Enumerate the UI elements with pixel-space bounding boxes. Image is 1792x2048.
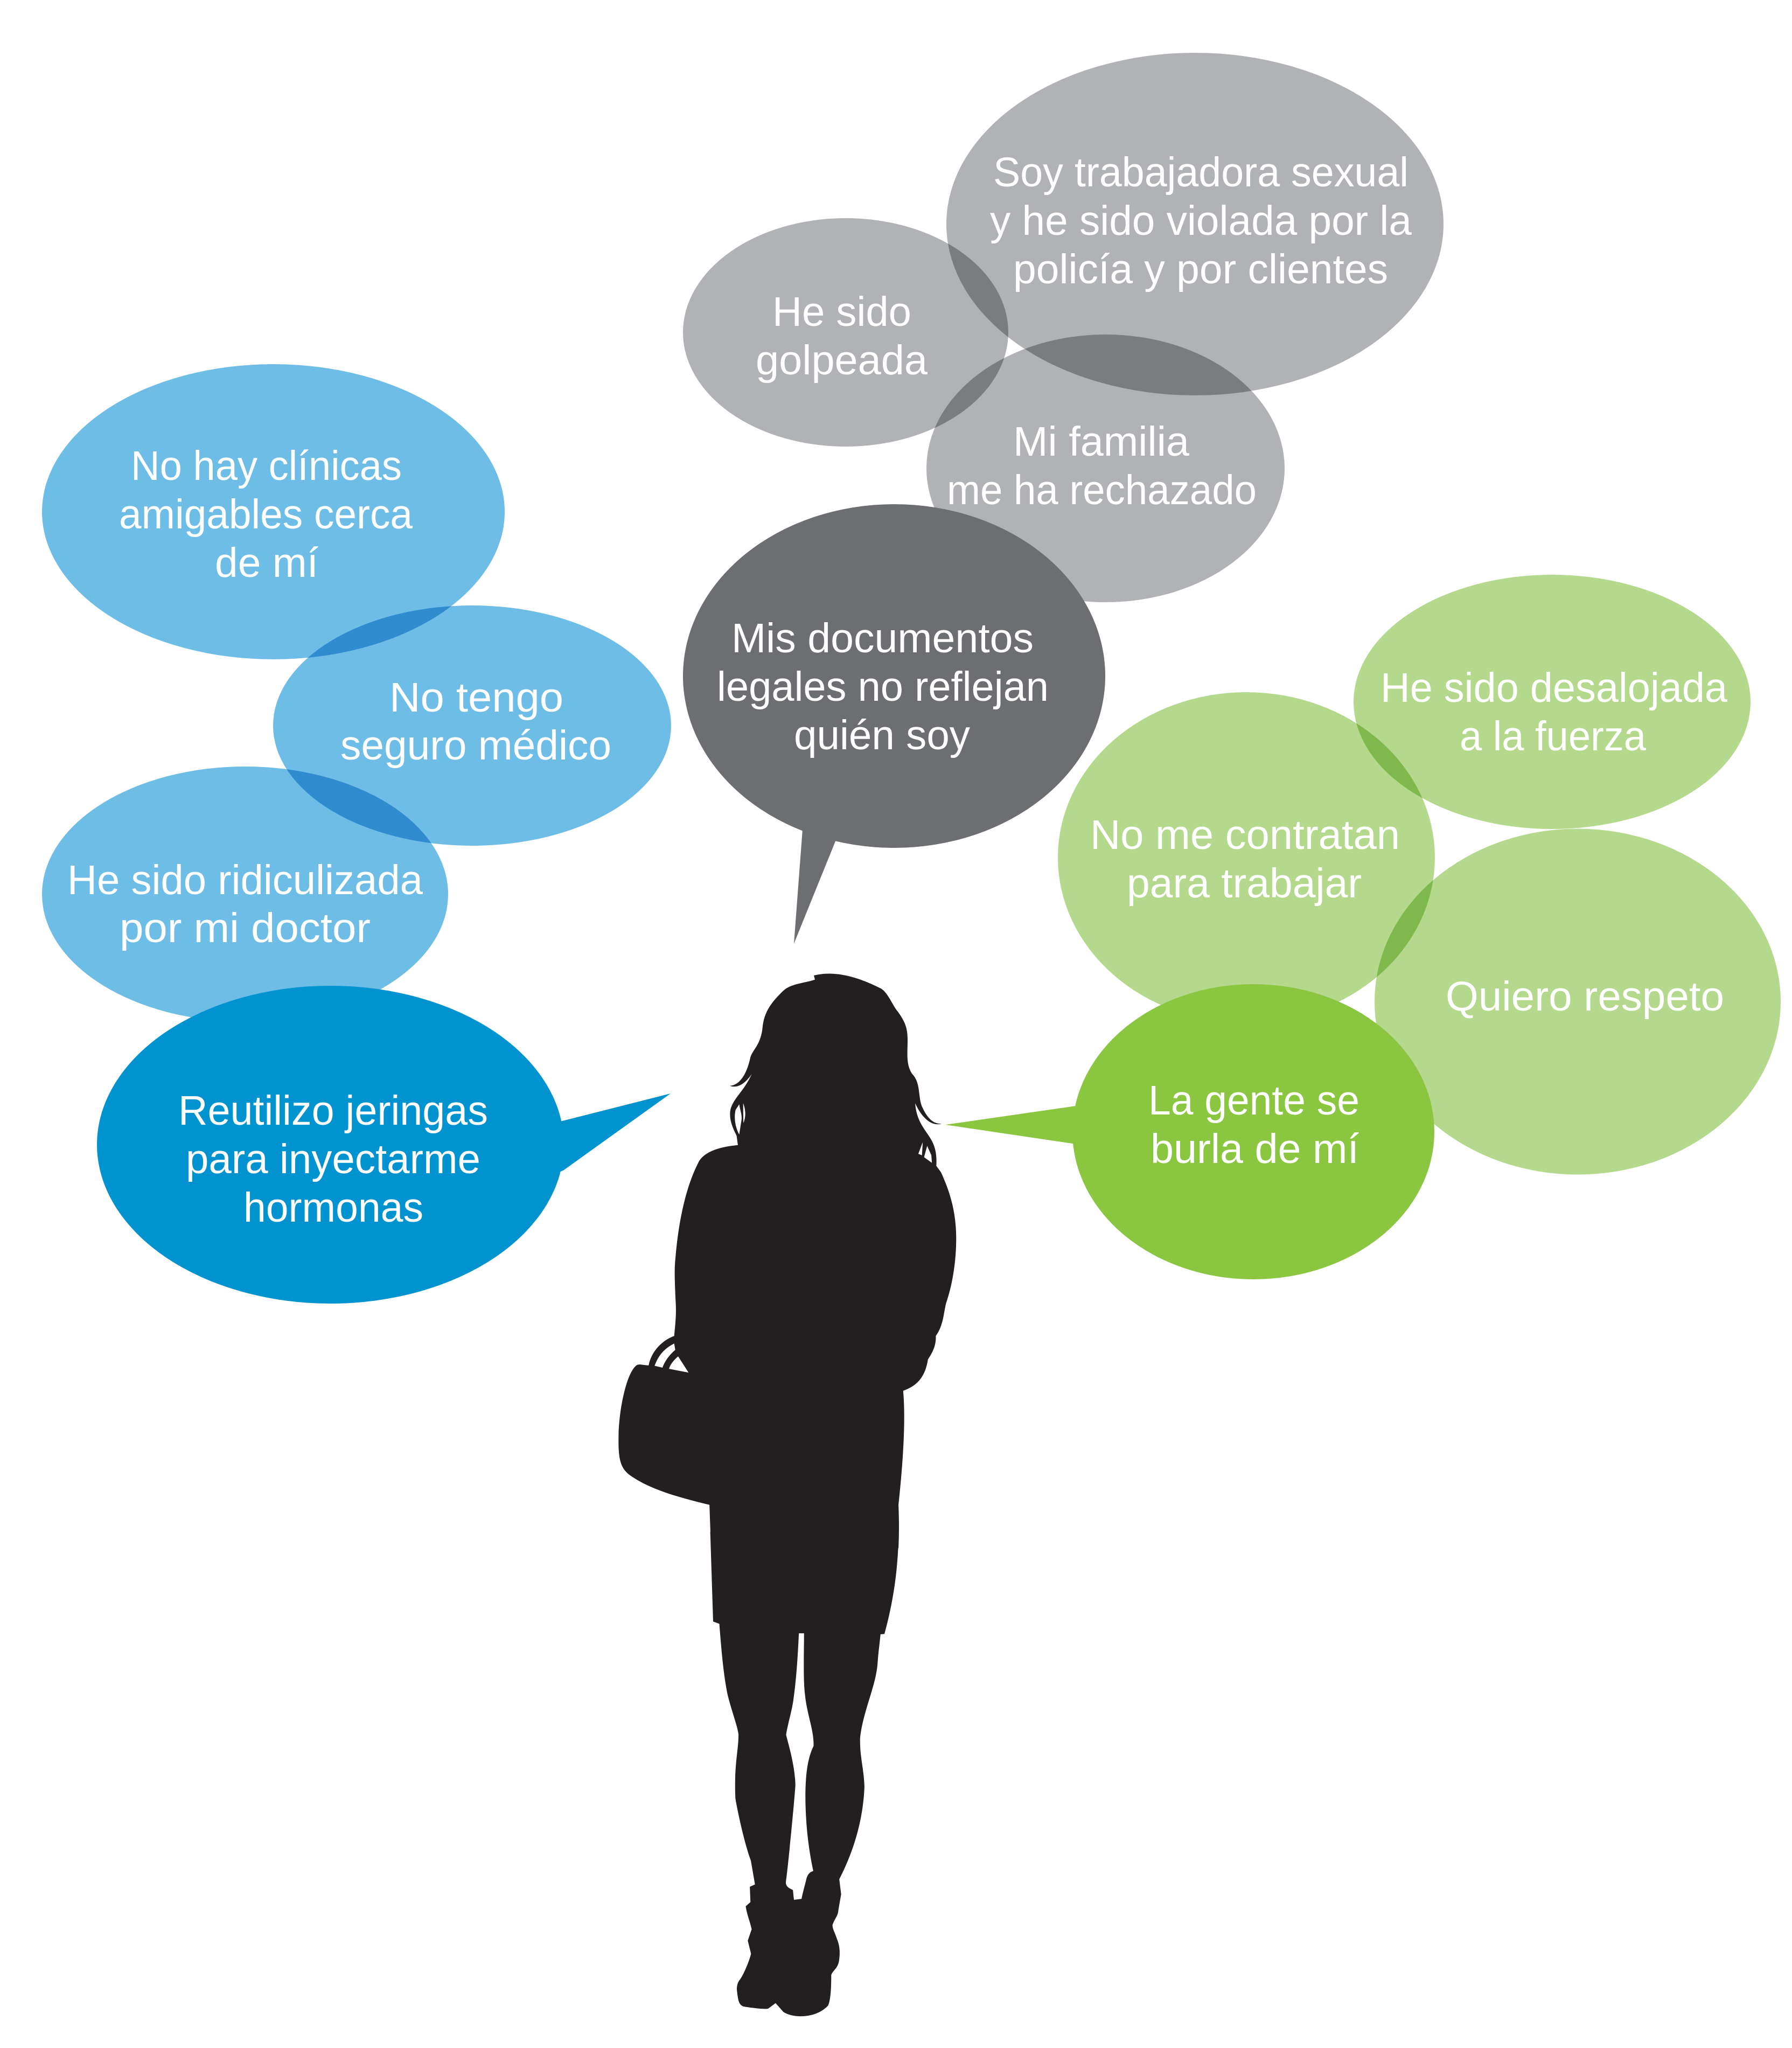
speech bubble: He sido ridiculizada por mi doctor: He sido ridiculizada xyxy=(67,857,423,903)
speech bubble: Reutilizo jeringas para inyectarme hormonas: para inyectarme xyxy=(186,1136,480,1182)
speech bubble: La gente se burla de mí xyxy=(945,984,1434,1279)
speech bubble: He sido ridiculizada por mi doctor xyxy=(42,767,448,1022)
speech bubble: Mis documentos legales no reflejan quién soy xyxy=(683,504,1105,944)
speech bubble: Mis documentos legales no reflejan quién soy: legales no reflejan xyxy=(717,664,1049,710)
speech bubble: Reutilizo jeringas para inyectarme hormonas: Reutilizo jeringas xyxy=(178,1088,488,1134)
speech bubble: No tengo seguro médico: seguro médico xyxy=(340,722,611,769)
speech bubble: Reutilizo jeringas para inyectarme hormonas xyxy=(97,986,671,1304)
speech bubble: No hay clínicas amigables cerca de mí xyxy=(42,364,505,659)
speech bubble: No me contratan para trabajar: para trabajar xyxy=(1127,860,1362,907)
speech bubble: Quiero respeto xyxy=(1375,828,1781,1174)
speech bubble: He sido desalojada a la fuerza xyxy=(1354,575,1751,829)
speech bubble: La gente se burla de mí: La gente se xyxy=(1148,1077,1359,1124)
speech bubble: Mi familia me ha rechazado xyxy=(926,335,1285,602)
speech bubble: He sido golpeada xyxy=(683,218,1008,447)
speech bubble: Soy trabajadora sexual y he sido violada por la policía y por clientes: y he sido violada por la xyxy=(990,198,1412,244)
speech bubble: No me contratan para trabajar xyxy=(1058,692,1435,1023)
speech bubble: He sido desalojada a la fuerza: a la fuerza xyxy=(1460,713,1646,760)
silhouette: woman with handbag xyxy=(618,974,956,2016)
speech bubble: He sido desalojada a la fuerza: He sido desalojada xyxy=(1380,665,1727,711)
speech bubble: Soy trabajadora sexual y he sido violada por la policía y por clientes: Soy trabajadora sexual xyxy=(993,149,1409,196)
speech bubble: He sido golpeada: He sido xyxy=(772,289,911,335)
speech bubble: Reutilizo jeringas para inyectarme hormonas: hormonas xyxy=(243,1185,423,1231)
speech bubble: Quiero respeto: Quiero respeto xyxy=(1446,973,1724,1020)
speech bubble: La gente se burla de mí: burla de mí xyxy=(1150,1126,1359,1172)
speech bubble: Soy trabajadora sexual y he sido violada por la policía y por clientes xyxy=(946,53,1444,395)
speech bubble: Mis documentos legales no reflejan quién soy: quién soy xyxy=(794,712,970,758)
speech bubble: No tengo seguro médico xyxy=(273,605,671,846)
speech bubble: No hay clínicas amigables cerca de mí: No hay clínicas xyxy=(131,443,402,489)
speech bubble: No tengo seguro médico: No tengo xyxy=(389,674,563,721)
speech bubble: Mi familia me ha rechazado: me ha rechazado xyxy=(947,467,1257,513)
speech bubble: He sido golpeada: golpeada xyxy=(756,337,928,384)
speech bubble: No hay clínicas amigables cerca de mí: de mí xyxy=(215,540,319,586)
speech bubble: No hay clínicas amigables cerca de mí: amigables cerca xyxy=(119,491,413,538)
speech bubble: Soy trabajadora sexual y he sido violada por la policía y por clientes: policía y por clientes xyxy=(1013,246,1388,292)
speech bubble: Mis documentos legales no reflejan quién soy: Mis documentos xyxy=(731,615,1034,661)
speech bubble: No me contratan para trabajar: No me contratan xyxy=(1090,812,1400,858)
speech bubble: Mi familia me ha rechazado: Mi familia xyxy=(1013,419,1189,465)
speech bubble: He sido ridiculizada por mi doctor: por mi doctor xyxy=(120,905,371,951)
